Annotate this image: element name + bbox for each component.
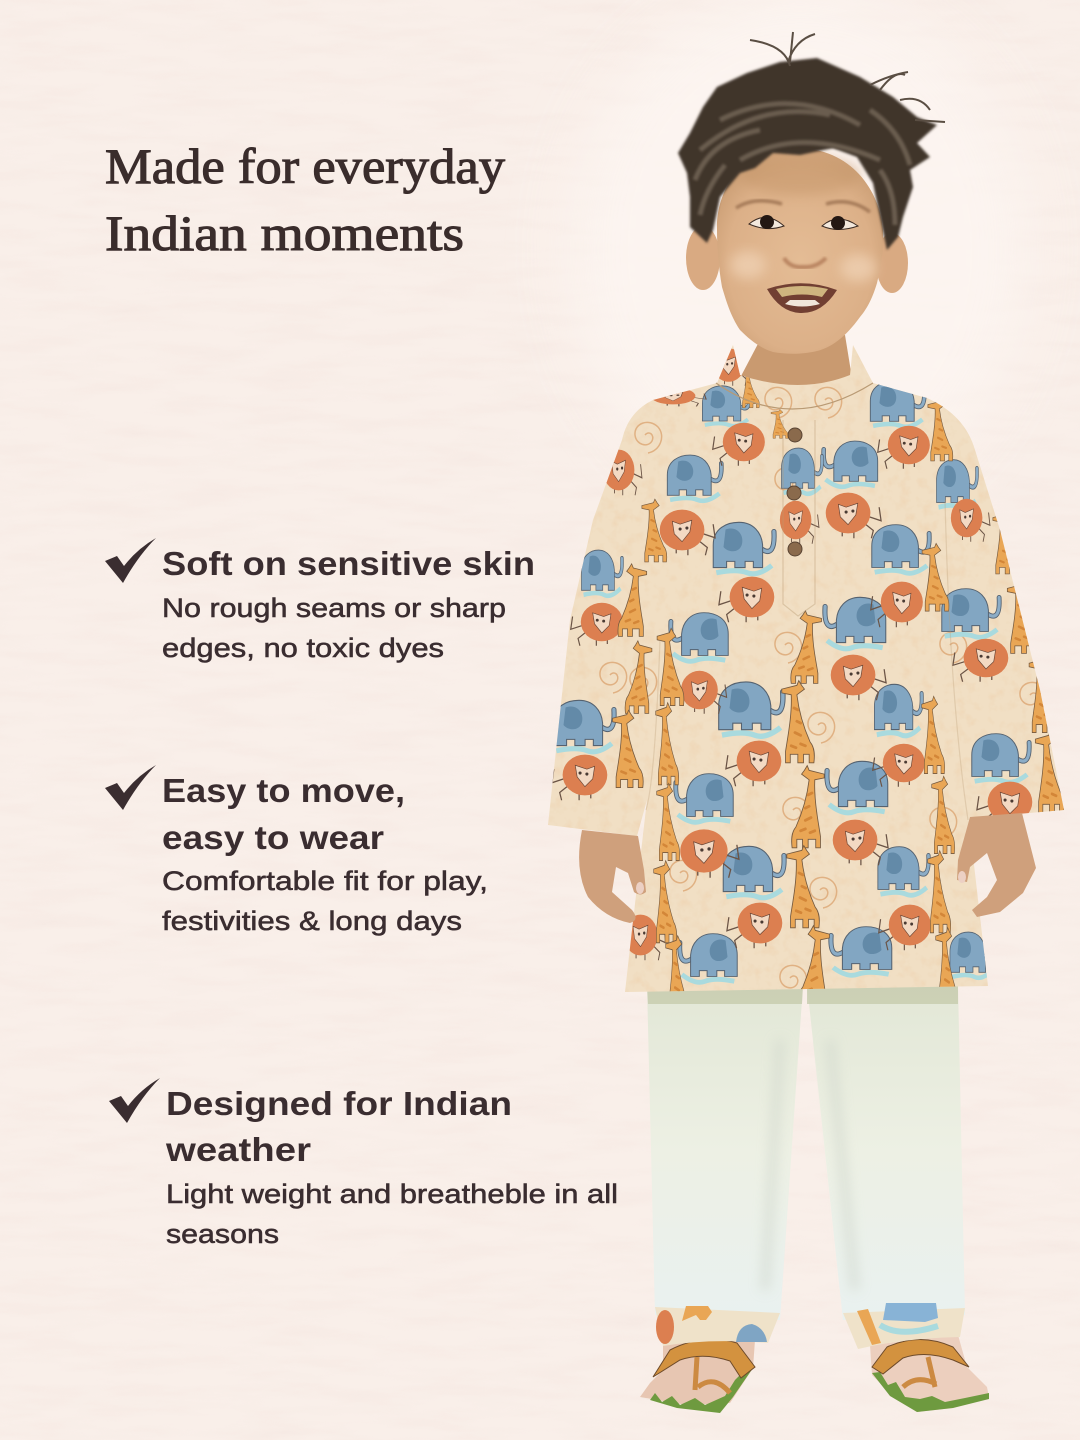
feature description: seasons xyxy=(166,1219,279,1249)
feature heading: Soft on sensitive skin xyxy=(162,545,535,582)
photo: smiling boy in printed kurta xyxy=(540,32,1070,1413)
collar and placket seams xyxy=(646,383,968,820)
feature description xyxy=(162,866,488,936)
title: Made for everyday xyxy=(105,138,505,194)
title: Indian moments xyxy=(105,205,464,261)
buttons xyxy=(787,428,802,556)
sandal straps xyxy=(653,1339,755,1378)
face xyxy=(717,148,883,354)
feature description: edges, no toxic dyes xyxy=(162,633,444,663)
feature: easy to move xyxy=(105,765,488,936)
icon: check mark xyxy=(105,765,156,810)
eyebrows xyxy=(736,201,870,212)
title xyxy=(105,138,505,261)
white pants xyxy=(647,985,965,1320)
feature heading xyxy=(162,772,405,856)
nose xyxy=(784,258,826,267)
feature description xyxy=(166,1179,618,1249)
smile xyxy=(767,283,837,313)
right foot xyxy=(870,1335,989,1412)
pant cuffs xyxy=(655,1303,965,1349)
animal print xyxy=(540,340,1070,1018)
ears xyxy=(686,226,908,293)
feature heading: easy to wear xyxy=(162,819,384,856)
feature heading xyxy=(165,1085,512,1168)
feature: designed for Indian weather xyxy=(109,1078,618,1249)
eyes xyxy=(749,215,858,230)
grass under feet xyxy=(640,1368,753,1413)
neck xyxy=(740,335,852,392)
feature heading: Easy to move, xyxy=(162,772,405,809)
hands xyxy=(579,813,1036,923)
feature: soft on sensitive skin xyxy=(105,538,535,663)
feature heading: weather xyxy=(165,1131,311,1168)
feet and sandals xyxy=(640,1335,989,1413)
icon: check mark xyxy=(105,538,156,583)
feature description: festivities & long days xyxy=(162,906,462,936)
kurta xyxy=(540,340,1070,1018)
kurta fabric xyxy=(548,345,1064,992)
feature heading: Designed for Indian xyxy=(166,1085,512,1122)
feature description: Comfortable fit for play, xyxy=(162,866,488,896)
lions xyxy=(552,348,1032,960)
hair xyxy=(678,32,945,250)
giraffes xyxy=(613,369,1064,1018)
feature description xyxy=(162,593,506,663)
left foot xyxy=(640,1340,755,1405)
feature description: No rough seams or sharp xyxy=(162,593,506,623)
feature description: Light weight and breatheble in all xyxy=(166,1179,618,1209)
elephants xyxy=(553,381,1029,982)
icon: check mark xyxy=(109,1078,160,1123)
